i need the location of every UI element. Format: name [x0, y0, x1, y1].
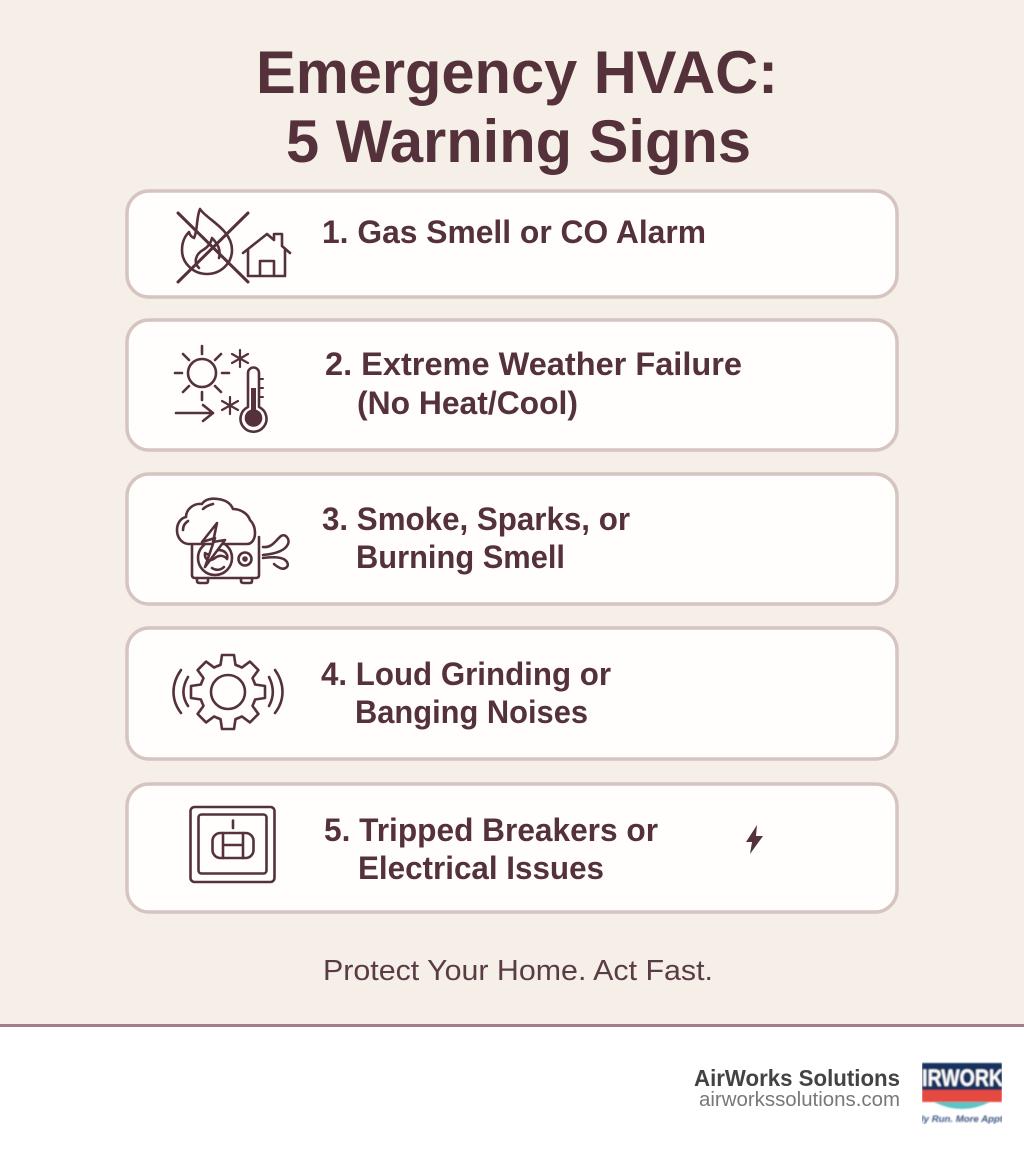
title: Emergency HVAC:	[256, 39, 778, 106]
label: sign 3: Burning Smell	[356, 539, 565, 575]
label: sign 3	[322, 501, 630, 575]
label: sign 1: 1. Gas Smell or CO Alarm	[322, 214, 706, 250]
logo: ly Run. More Appt	[921, 1114, 1004, 1124]
panel: warning sign 2	[127, 320, 897, 450]
icon: crossed-out flame and house	[178, 209, 290, 282]
title: 5 Warning Signs	[286, 108, 751, 175]
icon: gear with sound waves	[174, 655, 282, 729]
panel: warning sign 3	[127, 474, 897, 604]
label: sign 2	[325, 346, 742, 421]
footer	[0, 1024, 1024, 1154]
icon: smoking AC unit with lightning	[177, 499, 289, 583]
panel: warning sign 1	[127, 191, 897, 297]
label: sign 4: 4. Loud Grinding or	[321, 656, 611, 692]
tagline: Protect Your Home. Act Fast.	[323, 955, 713, 987]
logo	[922, 1062, 1002, 1124]
label: sign 2: 2. Extreme Weather Failure	[325, 346, 742, 382]
label: sign 4: Banging Noises	[355, 694, 588, 730]
brand name: AirWorks Solutions	[694, 1065, 900, 1091]
icon: small lightning bolt	[746, 825, 763, 854]
label: sign 3: 3. Smoke, Sparks, or	[322, 501, 630, 537]
label: sign 4	[321, 656, 611, 730]
icon: circuit breaker	[190, 807, 274, 882]
label: sign 2: (No Heat/Cool)	[357, 385, 578, 421]
title	[256, 39, 778, 175]
panel: warning sign 4	[127, 628, 897, 759]
icon: sun, snowflakes and thermometer	[175, 346, 266, 432]
label: sign 5: Electrical Issues	[358, 850, 604, 886]
label: sign 5	[324, 812, 658, 886]
panel: warning sign 5	[127, 784, 897, 912]
website: airworkssolutions.com	[699, 1089, 900, 1111]
label: sign 5: 5. Tripped Breakers or	[324, 812, 658, 848]
